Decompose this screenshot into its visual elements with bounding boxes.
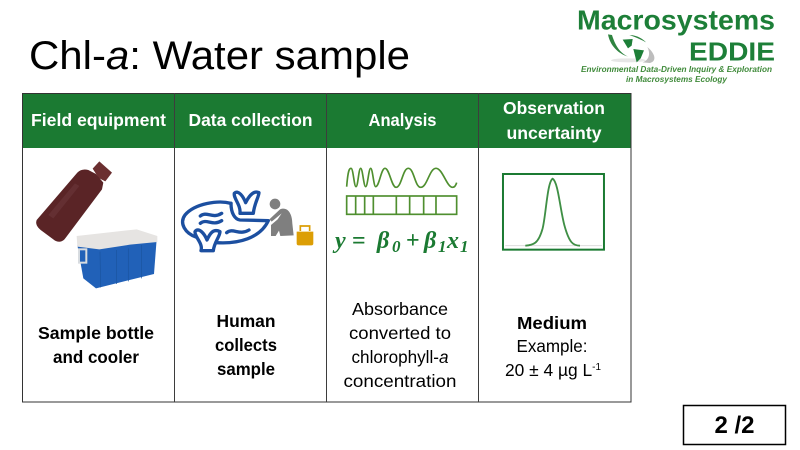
title: Chl-a: Water sample <box>29 34 410 78</box>
text: Sample bottle and cooler: and cooler <box>53 347 139 367</box>
text: Absorbance converted to chlorophyll-a concentration: converted to <box>349 323 451 343</box>
text: Human collects sample: Human <box>216 311 276 331</box>
header: Field equipment: Field equipment <box>31 110 166 130</box>
icon: sample bottle <box>36 161 112 242</box>
wave <box>347 168 457 187</box>
table header band <box>22 93 631 148</box>
text: Sample bottle and cooler <box>38 323 154 367</box>
logo: Macrosystems EDDIE: Macrosystems <box>577 4 775 36</box>
icon: absorbance waves <box>347 168 457 214</box>
icon: uncertainty distribution chart <box>503 174 604 250</box>
text: Medium example <box>505 313 601 380</box>
header: Data collection: Data collection <box>188 110 312 130</box>
text: Medium example: Medium <box>517 313 587 333</box>
equation: y <box>332 228 346 254</box>
equation: = <box>352 228 366 254</box>
logo: Macrosystems EDDIE: in Macrosystems Ecology <box>626 75 728 84</box>
table grid <box>22 93 631 402</box>
text: Absorbance converted to chlorophyll-a concentration: concentration <box>344 371 456 391</box>
text: Medium example: -1 <box>592 362 601 373</box>
logo: Macrosystems EDDIE <box>577 4 775 84</box>
text: Sample bottle and cooler: Sample bottle <box>38 323 154 343</box>
equation: 0 <box>392 237 401 256</box>
text: Human collects sample <box>215 311 277 379</box>
header: Observation uncertainty <box>503 98 605 143</box>
pond <box>183 192 268 251</box>
equation: β <box>423 228 437 254</box>
text: Absorbance converted to chlorophyll-a concentration <box>344 299 456 391</box>
header: Observation uncertainty: Observation <box>503 98 605 118</box>
icon: pond with human and cooler <box>183 192 313 251</box>
equation: β <box>376 228 390 254</box>
text: Absorbance converted to chlorophyll-a concentration: Absorbance <box>352 299 448 319</box>
header: Observation uncertainty: uncertainty <box>506 123 602 143</box>
logo: Macrosystems EDDIE: EDDIE <box>689 36 775 66</box>
equation: x <box>446 228 459 254</box>
cooler <box>297 226 313 245</box>
logo: Macrosystems EDDIE: Environmental Data-Driven Inquiry & Exploration <box>581 65 772 74</box>
spectrum bar <box>347 196 457 214</box>
equation: 1 <box>438 237 446 256</box>
text: Absorbance converted to chlorophyll-a concentration: chlorophyll-a <box>352 347 449 367</box>
equation: 1 <box>460 237 468 256</box>
page number box <box>684 406 786 444</box>
text: Medium example: Example: <box>516 336 588 356</box>
header: Analysis: Analysis <box>368 110 437 130</box>
person <box>269 199 294 236</box>
text: Human collects sample: sample <box>217 359 275 379</box>
icon: cooler <box>77 229 157 288</box>
table <box>22 93 631 402</box>
text: Human collects sample: collects <box>215 335 277 355</box>
equation: + <box>406 228 420 254</box>
text: Medium example: 20 ± 4 µg L <box>505 360 593 380</box>
page number box: 2 /2 <box>714 412 755 439</box>
